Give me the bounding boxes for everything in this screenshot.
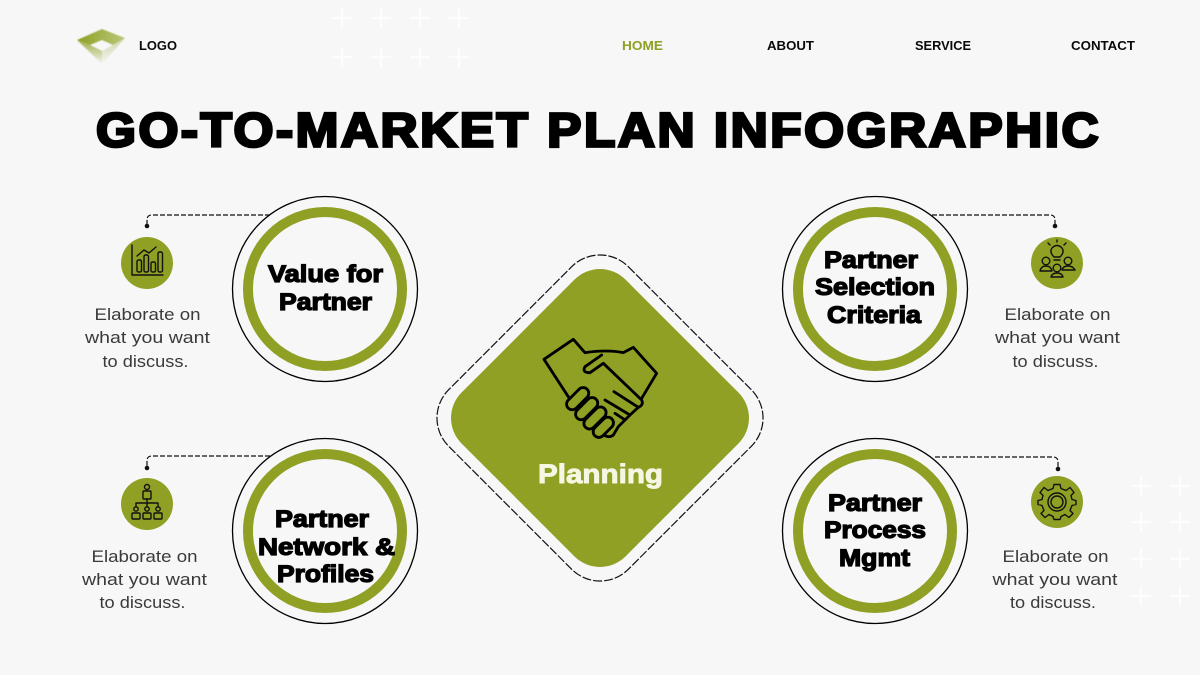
panel: partner selection criteria [782, 196, 1120, 382]
heading: Profiles [277, 561, 374, 588]
dashed diamond outline [420, 238, 780, 598]
label: planning: Planning [538, 459, 663, 489]
logo text: LOGO [139, 39, 177, 53]
text block: what you want [991, 571, 1118, 589]
text block: what you want [994, 329, 1120, 347]
nav: service: SERVICE [915, 39, 971, 53]
icon: gear [1031, 476, 1083, 528]
decorative plus grid: top [332, 8, 469, 67]
heading: Partner [824, 247, 918, 274]
heading: Criteria [827, 302, 922, 329]
circle [782, 196, 968, 382]
circle [782, 438, 968, 624]
nav: about: ABOUT [767, 39, 814, 53]
heading: Network & [258, 534, 395, 561]
text block [84, 306, 210, 371]
navigation [622, 39, 1135, 53]
text block: what you want [81, 571, 207, 589]
heading [268, 261, 383, 316]
connector [935, 457, 1060, 471]
decorative plus grid: right [1131, 476, 1190, 606]
text block: to discuss. [1010, 594, 1096, 612]
connector [932, 215, 1057, 228]
text block: Elaborate on [1002, 548, 1108, 566]
icon: handshake [544, 339, 657, 440]
connector [145, 456, 270, 470]
connector [145, 215, 270, 228]
panel: value for partner [84, 196, 417, 382]
icon: org chart [121, 478, 173, 530]
panel: partner network and profiles [81, 438, 417, 624]
heading: Partner [279, 289, 372, 316]
icon: bar chart [121, 237, 173, 289]
text block: to discuss. [100, 594, 186, 612]
heading: Selection [815, 274, 935, 301]
text block [991, 548, 1118, 612]
text block [81, 548, 207, 612]
panel: partner process management [782, 438, 1118, 624]
text block: Elaborate on [94, 306, 200, 324]
heading [258, 506, 395, 588]
text block: Elaborate on [92, 548, 198, 566]
logo icon [77, 29, 125, 64]
icon: team with lightbulb [1031, 237, 1083, 289]
heading [824, 490, 926, 572]
heading: Value for [268, 261, 383, 288]
text block [994, 306, 1120, 371]
circle [232, 196, 418, 382]
text block: to discuss. [102, 353, 188, 371]
title: GO-TO-MARKET PLAN INFOGRAPHIC [96, 103, 1099, 157]
heading: Process [824, 517, 926, 544]
nav: home: HOME [622, 39, 663, 53]
circle [232, 438, 418, 624]
heading: Partner [828, 490, 922, 517]
text block: what you want [84, 329, 210, 347]
text block: to discuss. [1012, 353, 1098, 371]
panel: central planning diamond [420, 238, 780, 598]
heading: Mgmt [839, 545, 910, 572]
text block: Elaborate on [1004, 306, 1110, 324]
nav: contact: CONTACT [1071, 39, 1135, 53]
green diamond [436, 254, 764, 582]
heading [815, 247, 935, 329]
heading: Partner [275, 506, 369, 533]
